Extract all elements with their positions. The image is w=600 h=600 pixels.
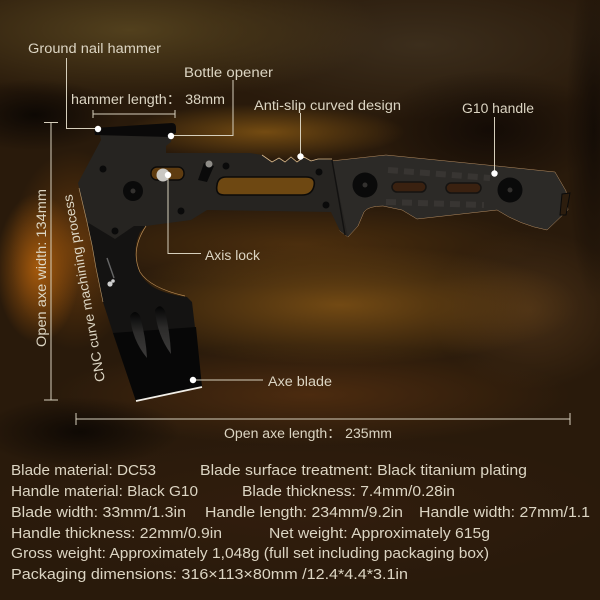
blade [87,200,202,401]
specifications text block: Handle thickness: 22mm/0.9in [11,526,222,542]
specifications text block: Gross weight: Approximately 1,048g (full set including packaging box) [11,546,489,562]
label: open axe width: Open axe width: 134mm [34,189,49,347]
screws [100,162,522,234]
dimension: open axe length [76,413,570,425]
leader: G10 handle [491,117,498,177]
label: hammer length: hammer length： 38mm [71,92,225,107]
dimension: open axe width [44,122,58,400]
specifications text block: Blade surface treatment: Black titanium plating [200,463,527,479]
specifications text block: Handle width: 27mm/1.1 [419,505,590,521]
specifications text block: Handle length: 234mm/9.2in [205,505,403,521]
specifications text block: Packaging dimensions: 316×113×80mm /12.4*4.4*3.1in [11,567,408,583]
axe illustration [78,123,570,401]
dimension: hammer length [93,110,175,118]
specifications text block: Blade material: DC53 [11,463,156,479]
leader: anti-slip [297,113,304,160]
specifications text block: Blade thickness: 7.4mm/0.28in [242,484,455,500]
specifications text block: Net weight: Approximately 615g [269,526,490,542]
lanyard hole [560,193,570,215]
handle ribs [386,170,490,205]
label: anti-slip curved design: Anti-slip curved design [254,98,401,113]
label: ground nail hammer: Ground nail hammer [28,41,162,56]
specifications text block: Handle material: Black G10 [11,484,198,500]
blade edge highlight [136,387,202,401]
label: open axe length: Open axe length： 235mm [224,426,392,441]
axe head G10 scale [78,135,348,239]
label: axis lock: Axis lock [205,248,260,263]
joint line [332,160,345,235]
leader: ground nail hammer [66,58,101,132]
leader: axe blade [190,377,263,383]
leader: bottle opener [168,80,233,139]
axis lock pin [198,163,214,182]
blade lower black zone [113,327,202,401]
hammer plate [94,123,176,137]
curved edge highlights [136,226,185,296]
handle [331,155,568,237]
blade fullers [130,312,147,358]
label: CNC curve machining process: CNC curve machining process [60,193,108,383]
label: G10 handle: G10 handle [462,101,534,116]
specifications text block: Blade width: 33mm/1.3in [11,505,186,521]
slots [217,177,314,195]
leader: axis lock [165,172,201,254]
label: axe blade: Axe blade [268,374,332,389]
blade logo [107,258,115,287]
specifications text block [11,463,590,583]
label: bottle opener: Bottle opener [184,65,274,80]
